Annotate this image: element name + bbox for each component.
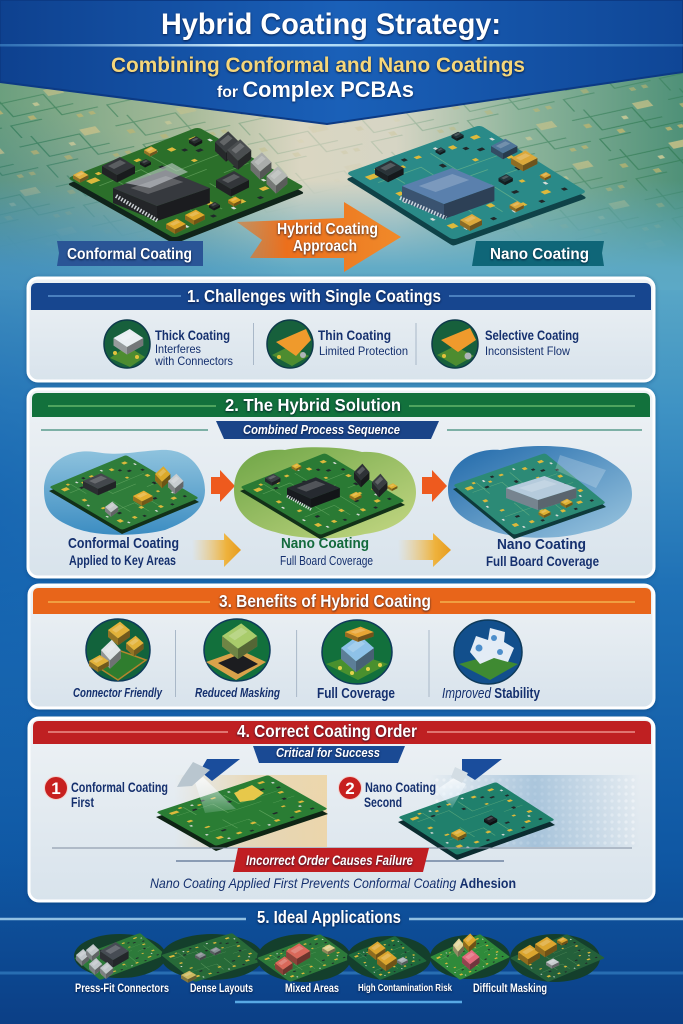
warning statement: Nano Coating Applied First Prevents Conformal Coating Adhesion	[150, 875, 516, 891]
panel 2 heading: 2. The Hybrid Solution	[225, 395, 401, 415]
caption: conformal coating: Conformal Coating	[68, 535, 179, 552]
panel card	[29, 718, 654, 901]
subtitle white: for Complex PCBAs	[217, 77, 414, 102]
panel 1 header bar	[31, 283, 651, 310]
main title: Hybrid Coating Strategy:	[161, 8, 501, 41]
red arrow 1	[211, 470, 235, 502]
text: thin coating: Thin Coating	[318, 327, 391, 343]
step 1 badge: 1	[51, 779, 61, 798]
gold arrow 2	[398, 533, 451, 567]
panel 3 header bar	[33, 588, 651, 614]
panel 1 heading: 1. Challenges with Single Coatings	[187, 286, 441, 306]
step 2 visual	[234, 447, 416, 539]
text: thick coating: with Connectors	[154, 354, 233, 368]
step 2 text: Nano Coating	[365, 780, 436, 795]
text: selective coating: Inconsistent Flow	[485, 344, 570, 358]
application 2	[161, 933, 266, 995]
title banner	[0, 0, 683, 124]
panel 2: hybrid solution	[28, 389, 654, 577]
step 2 badge: 2	[345, 779, 355, 798]
ribbon: incorrect order	[233, 848, 429, 872]
panel 3: benefits	[29, 585, 654, 708]
application 5	[430, 933, 547, 995]
icon: reduced masking	[204, 619, 270, 681]
panel 4 heading: 4. Correct Coating Order	[237, 721, 417, 741]
text: selective coating	[485, 327, 579, 358]
ribbon: critical for success: Critical for Success	[276, 746, 380, 760]
application 3	[257, 934, 353, 995]
label: Dense Layouts	[190, 981, 253, 995]
panel 3 heading: 3. Benefits of Hybrid Coating	[219, 591, 431, 611]
label: Press-Fit Connectors	[75, 981, 169, 995]
scene: conformal first	[156, 759, 328, 851]
panel 4: coating order	[29, 718, 654, 901]
hero: conformal coated board	[68, 127, 304, 244]
application 1	[74, 933, 169, 995]
section heading: 5. Ideal Applications	[257, 907, 401, 927]
text: reduced masking: Reduced Masking	[195, 685, 280, 700]
icon: thick coating	[104, 320, 150, 368]
text: full coverage: Full Coverage	[317, 686, 395, 702]
arrow label: Hybrid Coating	[277, 221, 378, 238]
caption: conformal coating: Applied to Key Areas	[69, 553, 176, 568]
hero: nano coated board	[346, 125, 587, 246]
label: conformal coating: Conformal Coating	[67, 246, 192, 263]
step 1 text: Conformal Coating	[71, 780, 168, 795]
step 2 badge	[338, 776, 362, 800]
step 1 badge	[44, 776, 68, 800]
text: thin coating	[318, 327, 408, 358]
panel 4 header bar	[33, 721, 651, 744]
gold arrow 1	[192, 533, 241, 567]
text: connector friendly: Connector Friendly	[73, 685, 163, 700]
text: thick coating: Thick Coating	[155, 327, 230, 343]
text: selective coating: Selective Coating	[485, 327, 579, 343]
ribbon: process sequence	[216, 421, 439, 439]
label: nano coating: Nano Coating	[490, 246, 589, 263]
text: improved stability: Improved Stability	[442, 686, 540, 702]
hybrid approach arrow: Approach	[293, 238, 357, 255]
panel card	[29, 585, 654, 708]
banner shape	[0, 0, 683, 124]
ribbon: incorrect order: Incorrect Order Causes Failure	[246, 853, 413, 868]
step 3 visual	[448, 446, 632, 539]
step 1 text	[71, 780, 168, 810]
step 1 visual	[44, 450, 205, 535]
step 2 text: Second	[364, 795, 402, 810]
application 6	[510, 934, 605, 982]
caption: nano coating green: Nano Coating	[281, 535, 369, 552]
application 4	[347, 936, 452, 994]
ribbon: critical for success	[253, 746, 405, 763]
text: thick coating: Interferes	[155, 342, 201, 356]
panel 1: challenges	[28, 278, 654, 381]
panel card	[28, 389, 654, 577]
hybrid approach arrow	[237, 202, 401, 272]
icon: improved stability	[454, 620, 522, 684]
panel 2 header bar	[32, 393, 650, 417]
red arrow 2	[422, 470, 447, 502]
icon: full coverage	[322, 620, 392, 684]
panel card	[28, 278, 654, 381]
text: thin coating: Limited Protection	[319, 344, 408, 358]
icon: selective coating	[432, 320, 478, 368]
scene: nano second	[398, 759, 640, 860]
label: nano coating	[472, 241, 604, 266]
text: thick coating	[154, 327, 233, 368]
label: conformal coating	[57, 241, 203, 266]
step 2 text	[364, 780, 436, 810]
step 1 text: First	[71, 795, 94, 810]
caption: nano coating blue: Nano Coating	[497, 536, 586, 553]
caption: nano coating blue: Full Board Coverage	[486, 553, 599, 569]
subtitle gold: Combining Conformal and Nano Coatings	[111, 54, 525, 77]
ribbon: process sequence: Combined Process Sequence	[243, 423, 400, 437]
caption: conformal coating	[68, 535, 179, 568]
label: High Contamination Risk	[358, 982, 452, 994]
circuit board scene backdrop	[0, 73, 683, 628]
caption: nano coating green	[280, 535, 373, 568]
label: Difficult Masking	[473, 981, 547, 995]
icon: thin coating	[267, 320, 313, 368]
banner highlight line	[0, 44, 683, 46]
label: Mixed Areas	[285, 981, 339, 995]
caption: nano coating green: Full Board Coverage	[280, 554, 373, 568]
caption: nano coating blue	[486, 536, 599, 569]
section 5: ideal applications	[0, 907, 683, 1002]
icon: connector friendly	[86, 619, 150, 681]
